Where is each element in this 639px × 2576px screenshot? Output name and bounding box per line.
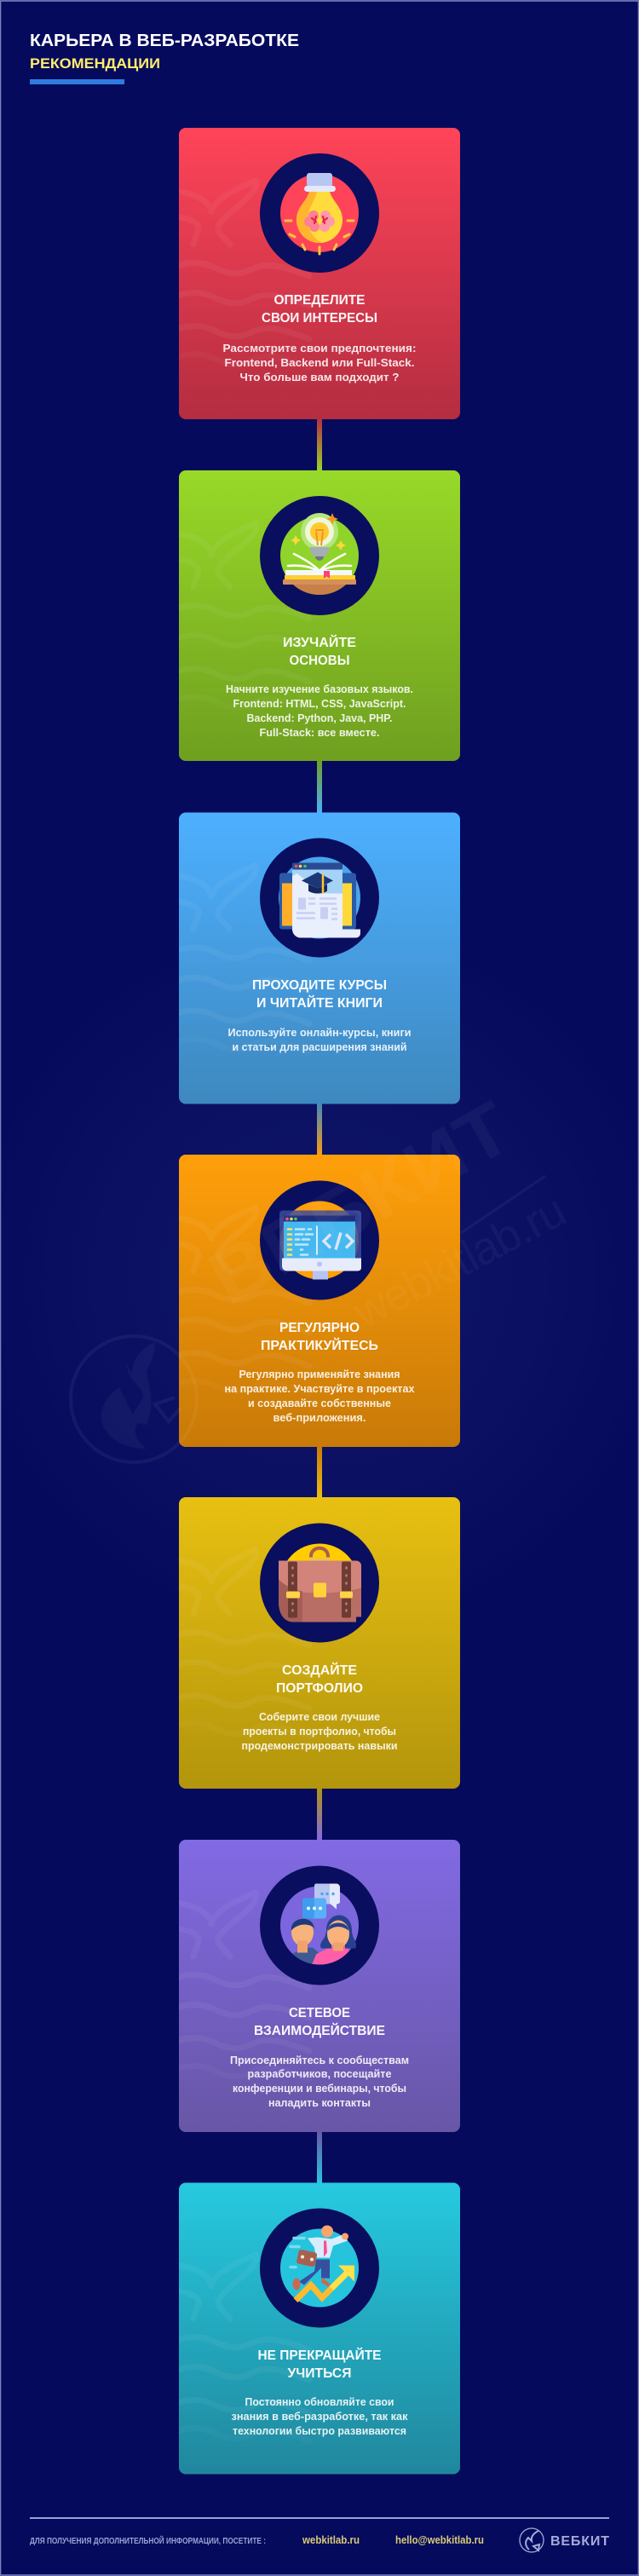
body text xyxy=(232,2396,408,2437)
icon: light bulb with brain xyxy=(280,173,359,254)
body text: на практике. Участвуйте в проектах xyxy=(225,1383,415,1395)
icon: briefcase xyxy=(279,1544,361,1622)
heading: ПРАКТИКУЙТЕСЬ xyxy=(261,1338,378,1353)
footer xyxy=(30,2517,609,2552)
heading: И ЧИТАЙТЕ КНИГИ xyxy=(256,995,383,1011)
body text: Постоянно обновляйте свои xyxy=(245,2396,394,2408)
panel: portfolio xyxy=(176,1497,460,1789)
watermark: ВЕБКИТ xyxy=(195,1085,526,1321)
title accent bar xyxy=(30,79,124,84)
panel: keep learning xyxy=(176,2183,460,2475)
watermark xyxy=(71,1085,574,1462)
heading xyxy=(252,978,387,1011)
connector 1 xyxy=(317,418,322,472)
connector 4 xyxy=(317,1445,322,1499)
icon: running businessman with rising arrow xyxy=(280,2226,359,2308)
body text: Регулярно применяйте знания xyxy=(239,1369,400,1380)
heading xyxy=(254,2006,385,2038)
body text: проекты в портфолио, чтобы xyxy=(243,1726,396,1738)
heading: ОПРЕДЕЛИТЕ xyxy=(274,293,365,308)
heading xyxy=(276,1663,363,1696)
heading: ПРОХОДИТЕ КУРСЫ xyxy=(252,978,387,993)
body text: конференции и вебинары, чтобы xyxy=(233,2083,406,2095)
body text: технологии быстро развиваются xyxy=(233,2425,406,2437)
logo icon xyxy=(520,2528,544,2552)
icon: open book with bulb xyxy=(280,513,359,596)
panel: networking xyxy=(176,1840,460,2132)
body text xyxy=(230,2054,409,2109)
panel: courses and books xyxy=(176,813,460,1104)
heading: УЧИТЬСЯ xyxy=(288,2366,351,2381)
connector 2 xyxy=(317,759,322,815)
body text: Используйте онлайн-курсы, книги xyxy=(228,1027,411,1039)
heading: ОСНОВЫ xyxy=(290,654,349,668)
body text: Присоединяйтесь к сообществам xyxy=(230,2054,409,2066)
body text: Соберите свои лучшие xyxy=(259,1711,380,1723)
connector 5 xyxy=(317,1787,322,1841)
body text: Что больше вам подходит ? xyxy=(240,372,399,383)
body text: и статьи для расширения знаний xyxy=(232,1041,407,1053)
body text xyxy=(228,1027,411,1053)
title block xyxy=(30,32,299,84)
heading xyxy=(261,1321,378,1353)
icon: two people talking xyxy=(280,1883,359,1965)
body text: разработчиков, посещайте xyxy=(247,2068,392,2080)
website link: webkitlab.ru xyxy=(302,2534,360,2546)
body text: знания в веб-разработке, так как xyxy=(232,2411,408,2423)
body text: наладить контакты xyxy=(268,2097,371,2109)
body text xyxy=(242,1711,397,1752)
body text: Backend: Python, Java, PHP. xyxy=(247,712,392,724)
body text: продемонстрировать навыки xyxy=(242,1740,397,1752)
panel: practice xyxy=(176,1155,460,1447)
body text: Frontend, Backend или Full-Stack. xyxy=(225,357,414,369)
footer note: ДЛЯ ПОЛУЧЕНИЯ ДОПОЛНИТЕЛЬНОЙ ИНФОРМАЦИИ, ПОСЕТИТЕ : xyxy=(30,2535,266,2546)
heading: ВЗАИМОДЕЙСТВИЕ xyxy=(254,2023,385,2038)
body text xyxy=(223,343,416,383)
email link: hello@webkitlab.ru xyxy=(395,2534,484,2546)
heading: СВОИ ИНТЕРЕСЫ xyxy=(262,311,377,326)
watermark: webkitlab.ru xyxy=(344,1184,574,1339)
background glow xyxy=(0,852,639,1704)
panel: basics xyxy=(176,470,460,761)
body text xyxy=(225,1369,415,1424)
body text: веб-приложения. xyxy=(273,1412,366,1424)
panel: interests xyxy=(176,128,460,419)
icon: laptop with graduation cap xyxy=(279,857,360,939)
heading: СОЗДАЙТЕ xyxy=(282,1663,357,1678)
logo wordmark: ВЕБКИТ xyxy=(550,2534,609,2549)
body text: Frontend: HTML, CSS, JavaScript. xyxy=(233,698,406,710)
body text: Full-Stack: все вместе. xyxy=(259,727,380,739)
connector 6 xyxy=(317,2130,322,2185)
title: КАРЬЕРА В ВЕБ-РАЗРАБОТКЕ xyxy=(30,32,299,50)
body text: Начните изучение базовых языков. xyxy=(226,683,413,695)
body text xyxy=(226,683,413,739)
subtitle: РЕКОМЕНДАЦИИ xyxy=(30,56,160,72)
heading xyxy=(283,635,356,668)
heading: СЕТЕВОЕ xyxy=(289,2006,350,2020)
heading: ПОРТФОЛИО xyxy=(276,1681,363,1696)
icon: monitor with code xyxy=(279,1202,361,1280)
connector 3 xyxy=(317,1102,322,1156)
heading xyxy=(257,2348,382,2381)
heading xyxy=(262,293,377,326)
body text: Рассмотрите свои предпочтения: xyxy=(223,343,416,354)
heading: ИЗУЧАЙТЕ xyxy=(283,635,356,650)
heading: НЕ ПРЕКРАЩАЙТЕ xyxy=(257,2348,382,2363)
body text: и создавайте собственные xyxy=(248,1397,391,1409)
heading: РЕГУЛЯРНО xyxy=(279,1321,360,1335)
